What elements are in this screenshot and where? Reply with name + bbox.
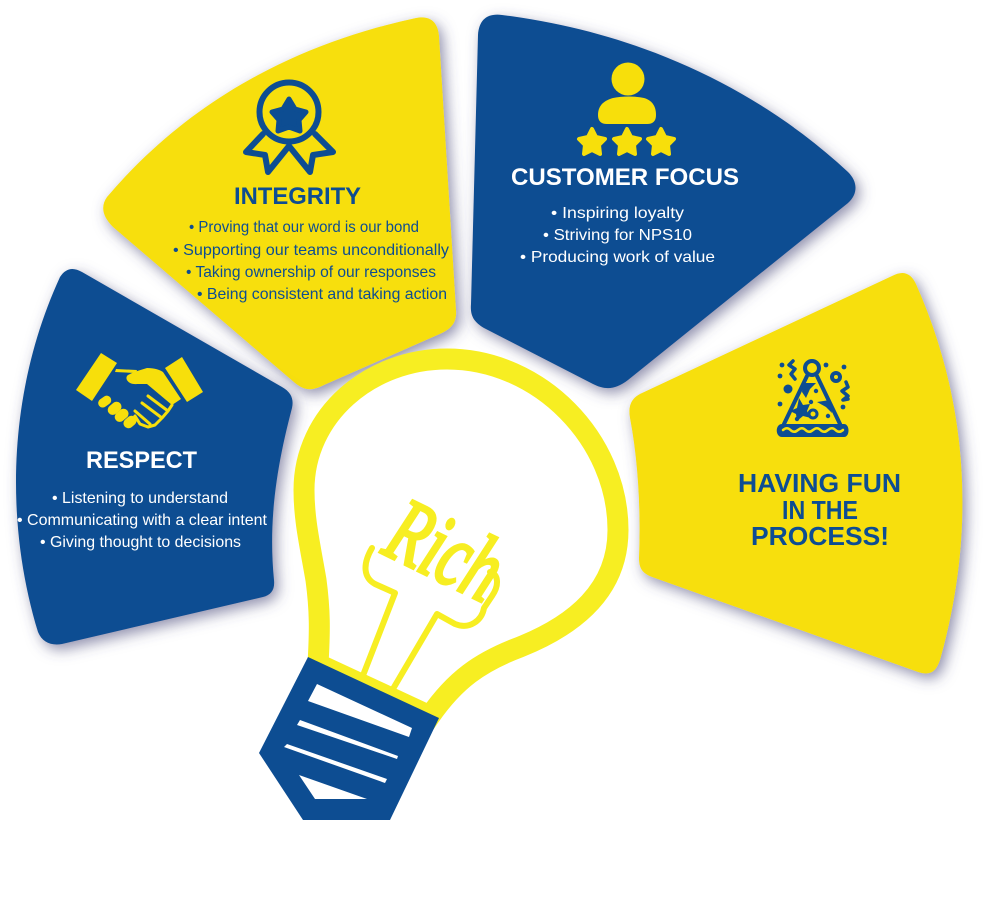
text block: respect bullets <box>17 490 268 551</box>
heading: respect: RESPECT <box>86 447 197 474</box>
heading: having fun: IN THE <box>782 497 858 525</box>
heading: integrity: INTEGRITY <box>234 183 361 210</box>
panel: having fun <box>629 273 962 674</box>
text block: integrity bullets: • Being consistent and taking action <box>197 286 447 303</box>
panel: integrity <box>103 17 456 389</box>
heading: having fun: PROCESS! <box>751 523 889 551</box>
text block: integrity bullets: • Supporting our teams unconditionally <box>173 242 449 259</box>
heading: customer focus: CUSTOMER FOCUS <box>511 164 739 191</box>
icon: award medal <box>246 82 333 172</box>
bulb base <box>259 657 439 820</box>
illustration: light bulb <box>259 359 618 820</box>
text block: integrity bullets: • Taking ownership of our responses <box>186 264 436 281</box>
text block: respect bullets: • Giving thought to decisions <box>40 534 241 551</box>
panel: respect <box>16 269 293 644</box>
logotype: Rich: Rich <box>371 478 520 621</box>
text block: integrity bullets: • Proving that our word is our bond <box>189 219 419 236</box>
icon: party hat <box>777 361 848 437</box>
text block: integrity bullets <box>173 219 449 303</box>
text block: respect bullets: • Listening to understand <box>52 490 228 507</box>
heading: having fun: HAVING FUN <box>738 470 901 498</box>
text block: respect bullets: • Communicating with a clear intent <box>17 512 268 529</box>
text block: customer focus bullets <box>520 205 715 266</box>
heading: having fun <box>738 470 901 551</box>
panel: customer focus <box>471 15 856 388</box>
icon: handshake <box>76 353 203 430</box>
text block: customer focus bullets: • Producing work of value <box>520 249 715 266</box>
text block: customer focus bullets: • Striving for NPS10 <box>543 227 692 244</box>
filament <box>362 548 497 694</box>
text block: customer focus bullets: • Inspiring loyalty <box>551 205 684 222</box>
icon: person with stars <box>579 62 674 154</box>
